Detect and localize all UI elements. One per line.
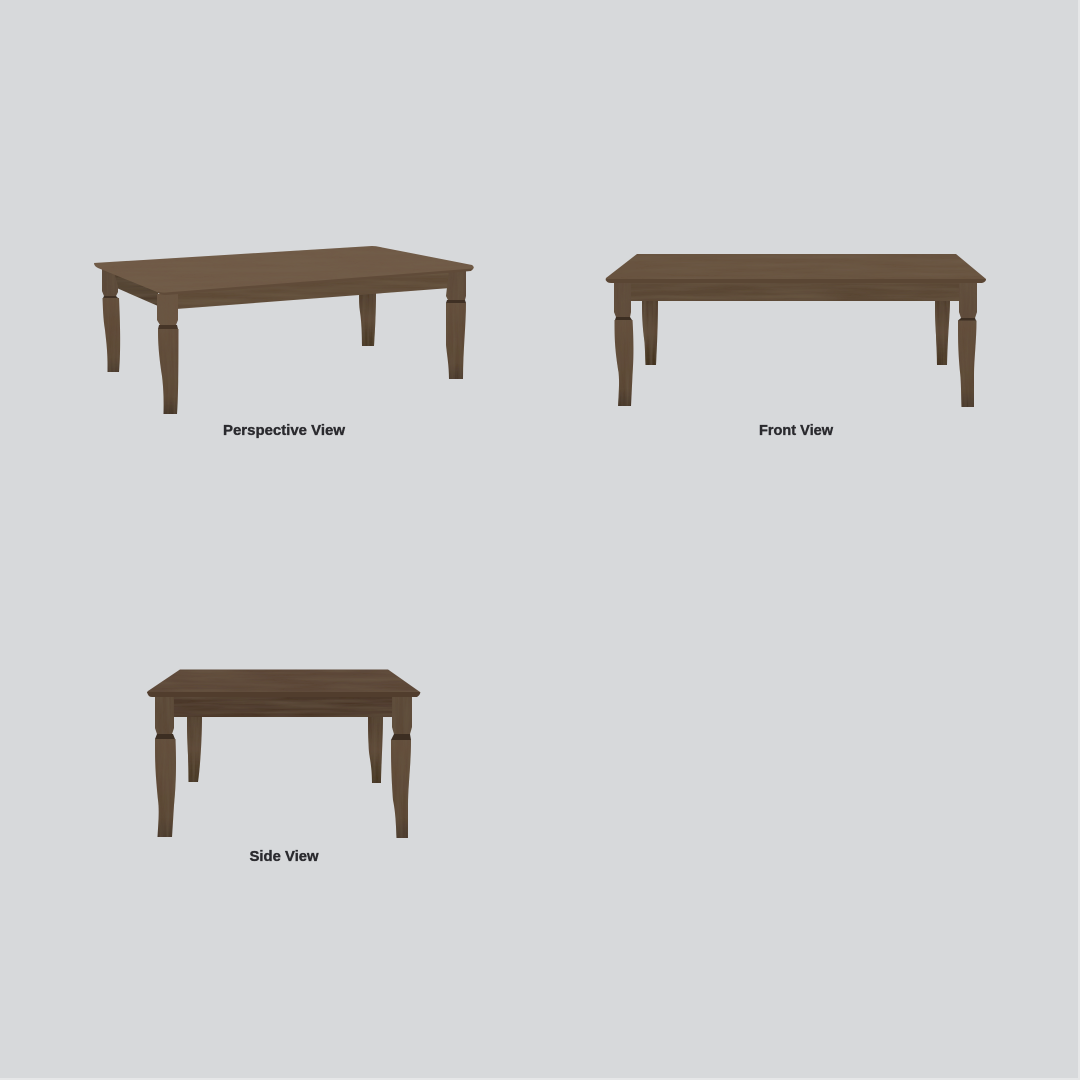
right leg — [958, 283, 977, 407]
caption: perspective view: Perspective View — [223, 423, 346, 439]
left leg — [614, 283, 633, 406]
back leg — [359, 293, 376, 346]
back right leg — [935, 300, 950, 365]
caption: side view: Side View — [250, 849, 319, 865]
right leg — [446, 271, 466, 379]
table top edge — [158, 268, 473, 295]
right leg — [391, 697, 412, 838]
table top — [147, 670, 420, 693]
left leg — [102, 268, 120, 372]
front corner leg — [157, 294, 178, 414]
apron — [629, 282, 961, 301]
table top edge — [147, 692, 420, 697]
back right leg — [368, 716, 383, 783]
left leg — [155, 697, 176, 837]
left side apron — [110, 270, 158, 306]
panel: side view — [147, 670, 420, 838]
table top — [94, 246, 474, 294]
table top edge — [606, 279, 986, 283]
back left leg — [187, 716, 202, 782]
apron — [172, 696, 394, 717]
back left leg — [642, 300, 658, 365]
caption: front view: Front View — [759, 423, 834, 439]
panel: front view — [606, 254, 986, 407]
panel: perspective view — [94, 246, 474, 414]
table top — [606, 254, 986, 281]
front apron — [176, 271, 450, 309]
